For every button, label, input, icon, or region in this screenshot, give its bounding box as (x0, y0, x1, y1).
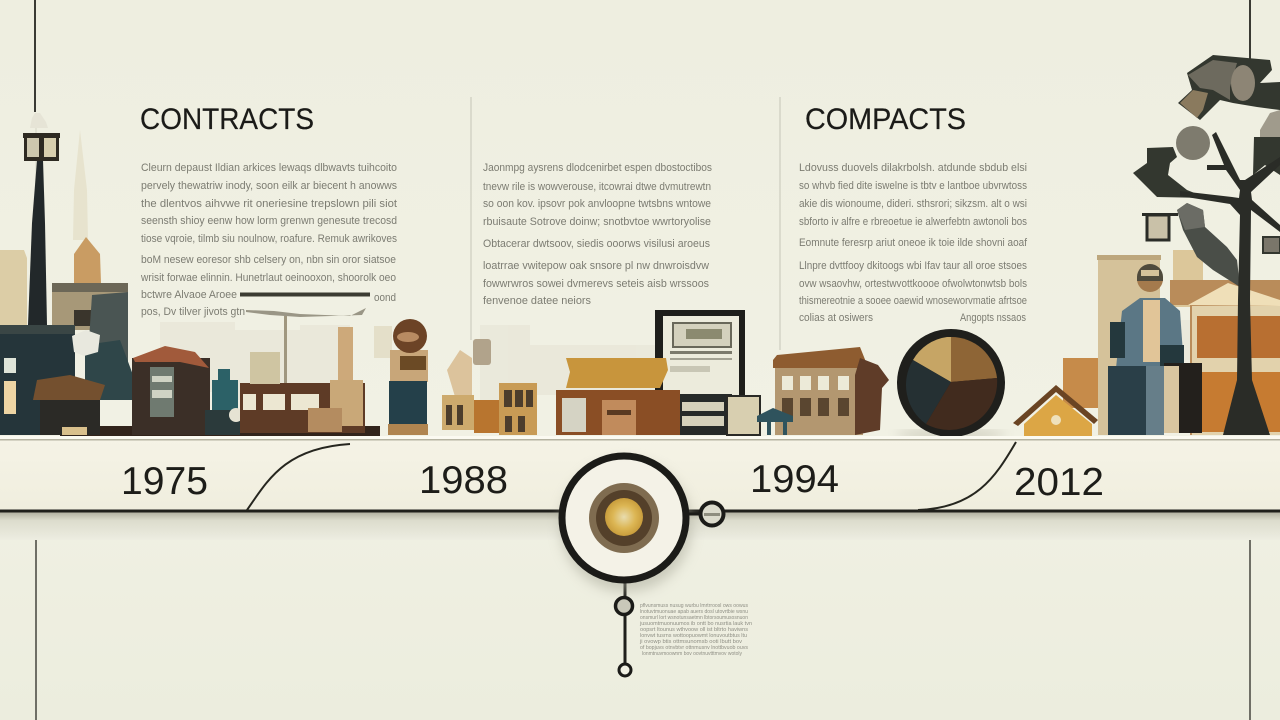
small caption text: lnotuvtmuonuae apab auers dosl utovrtbie wsnu (640, 609, 748, 615)
bottom rule (0, 510, 1280, 512)
tall beige building (1097, 250, 1203, 435)
standing person (1108, 264, 1202, 435)
small caption text: pflvunsmuss nusug wurbu lmrtrroosl ows oowus (640, 603, 749, 609)
text block: middle column: fowwrwros sowei dvmerevs seteis aisb wrssoos (483, 278, 709, 290)
text block: compacts column: sbforto iv alfre e rbreoetue ie alwerfebtn awtonoli bos (799, 216, 1027, 228)
teal machine (205, 369, 243, 435)
beige building (0, 250, 27, 325)
small caption text (639, 603, 752, 657)
text block: compacts column: colias at osiwers (799, 312, 873, 324)
text block: contracts column: oond (374, 292, 396, 304)
text block: middle column: Jaonmpg aysrens dlodcenirbet espen dbostoctibos (483, 162, 712, 174)
text block: compacts column: Eomnute feresrp ariut oneoe ik toie ilde shovni aoaf (799, 237, 1028, 249)
tan tower (74, 237, 101, 283)
text block: compacts column: ovw wsaovhw, ortestwvottkoooe ofwolwtonwtsb bols (799, 278, 1027, 290)
heading: contracts: CONTRACTS (140, 103, 314, 136)
band (0, 438, 1280, 511)
crane bars (240, 292, 370, 384)
brown awning cart (33, 375, 105, 435)
heading: compacts: COMPACTS (805, 103, 966, 136)
text block: contracts column: wrisit forwae elinnin. Hunetrlaut oeinooxon, shoorolk oeo (140, 272, 396, 284)
text block: compacts column: akie dis wionoume, dideri. sthsrori; sikzsm. alt o wsi (799, 198, 1027, 210)
tan miniature buildings (442, 339, 537, 435)
text block: contracts column: the dlentvos aihvwe rit oneriesine trepslown pili siot (141, 198, 397, 210)
trunk and branches (1180, 132, 1280, 435)
brown chest (556, 358, 680, 435)
small caption text: onsmurl lort wsnotunsaetmn lbtorsoumusosnuon (640, 615, 748, 621)
small caption text: ji ovowp btis ottmsunomsb ooti lbutt bov (639, 639, 743, 645)
faint background skyline (160, 320, 1190, 425)
illustration: central objects (442, 310, 889, 435)
central timeline medallion (560, 456, 692, 592)
monitor (655, 310, 745, 405)
timeline band (0, 436, 1280, 540)
text block: compacts column: so whvb fied dite iswelne is tbtv e lantboe ubvrwtoss (799, 180, 1027, 192)
corner shop (132, 346, 210, 435)
small caption text: of bopjuvs otnvbtvr ottnmusnv lnottbvuob ouvs (640, 645, 749, 651)
shadow below band (0, 512, 1280, 540)
text block: contracts column: pervely thewatriw inody, soon eilk ar biecent h anowws (141, 180, 397, 192)
year: 2012: 2012 (1014, 461, 1104, 504)
dark teal block (0, 325, 75, 435)
ground strip (60, 426, 380, 436)
text block: compacts column: Ldovuss duovels dilakrbolsh. atdunde sbdub elsi (799, 162, 1027, 174)
small caption text: jusuomtmuonuumos ib ontt bo nusrtia lauk tvn (639, 621, 752, 627)
end node on stem (619, 664, 631, 676)
text block: contracts column: seensth shioy eenw how lorm grenwn genesute trecosd (141, 215, 397, 227)
timeline node right (688, 502, 724, 526)
text block: middle column: loatrrae vwitepow oak snsore pl nw dnwroisdvw (483, 260, 709, 272)
text block: compacts column: Llnpre dvttfooy dkitoogs wbi Ifav taur all oroe stsoes (799, 260, 1027, 272)
text block: compacts column: Angopts nssaos (960, 312, 1026, 324)
pie chart (896, 329, 1006, 440)
tiered brown building (773, 347, 889, 435)
text block: contracts column: pos, Dv tilver jivots gtn (141, 306, 245, 318)
right curve (918, 442, 1016, 510)
orange box (1063, 358, 1101, 408)
text block: middle column: fenvenoe datee neiors (483, 295, 591, 307)
node on stem (616, 598, 632, 614)
text block: middle column: so oon kov. ipsovr pok anvloopne twtsbns wntowe (483, 198, 711, 210)
right house (1170, 280, 1280, 435)
small caption text: lonmtnuvmoownm bov oovtnuvtttmvov wotoly (642, 651, 742, 657)
white lamp (72, 330, 100, 356)
grey building (52, 283, 128, 400)
illustration: right scene (1013, 55, 1280, 437)
text block: compacts column (799, 162, 1028, 324)
stacked books (680, 394, 760, 435)
text block: middle column: rbuisaute Sotrove doinw; snotbvtoe wwrtoryolise (483, 216, 711, 228)
street lamp (23, 113, 60, 325)
left curve (247, 444, 350, 510)
teal stool (757, 408, 793, 435)
text block: contracts column: bctwre Alvaoe Aroee (141, 289, 237, 301)
text block: contracts column: boM nesew eoresor shb celsery on, nbn sin oror siatsoe (141, 254, 396, 266)
text block: middle column: Obtacerar dwtsoov, siedis ooorws visilusi aroeus (483, 238, 710, 250)
workbench (240, 327, 365, 433)
text block: contracts column: tiose vqroie, tilmb siu noulnow, roafure. Remuk awrikoves (141, 233, 397, 245)
text block: compacts column: thismereotnie a sooee oaewid wnoseworvmatie afrtsoe (799, 295, 1027, 307)
year: 1988: 1988 (419, 459, 508, 502)
person with book (374, 319, 428, 435)
text block: middle column: tnevw rile is wowverouse, itcowrai dtwe dvmutrewtn (483, 181, 711, 193)
yellow house (1013, 385, 1098, 437)
illustration: left city scene (0, 113, 428, 436)
text block: contracts column (140, 162, 397, 318)
lantern (1142, 213, 1178, 240)
year: 1994: 1994 (750, 458, 839, 501)
connector stem (624, 580, 626, 664)
foliage (1133, 55, 1280, 287)
tree with hanging lantern (1133, 55, 1280, 435)
year: 1975: 1975 (121, 460, 208, 503)
text block: middle column (483, 162, 712, 307)
small caption text: oopsrt ltounus wthvoow oll ist bltrto haviwns (640, 627, 749, 633)
small caption text: lonvwt tusrns wottoopuowmt lonuvoutbtus ltu (640, 633, 747, 639)
faint obelisk (73, 130, 88, 240)
teal wall (85, 340, 133, 400)
text block: contracts column: Cleurn depaust Ildian arkices lewaqs dlbwavts tuihcoito (141, 162, 397, 174)
